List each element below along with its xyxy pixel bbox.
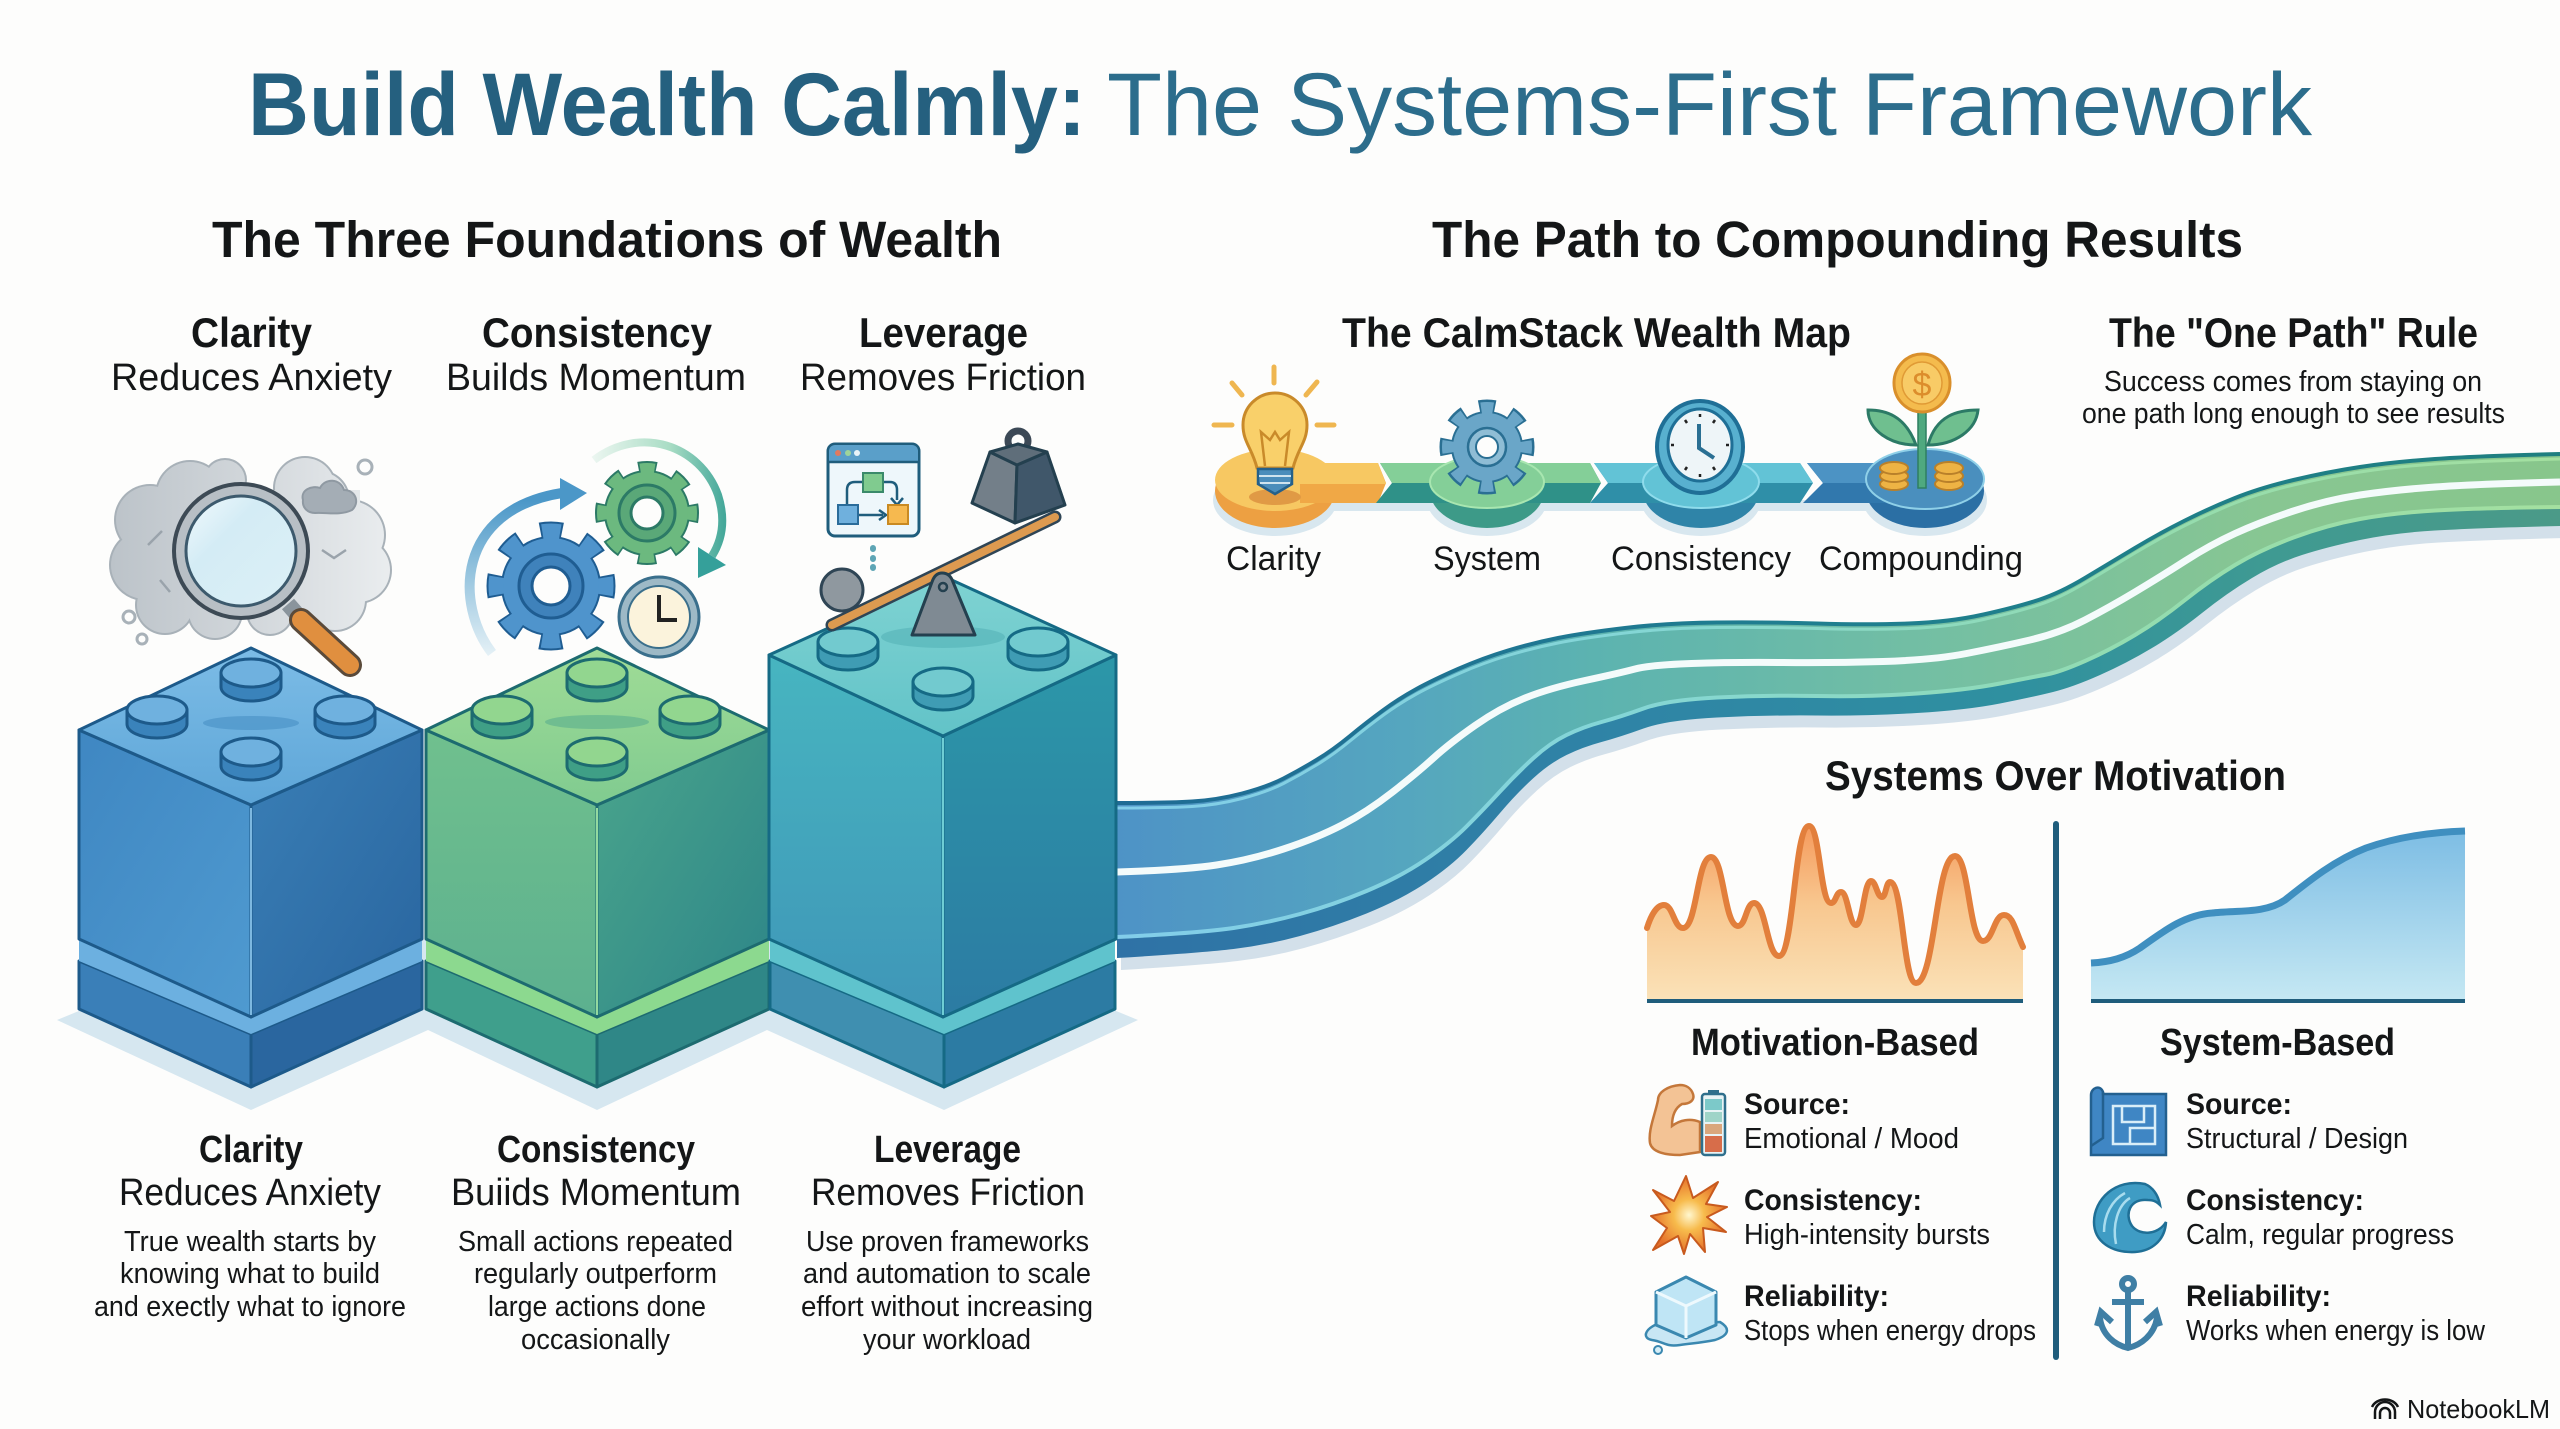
icon: coin plant: $	[1913, 366, 1932, 404]
foundation description: clarity: Clarity	[199, 1129, 303, 1171]
one path rule: one path long enough to see results	[2082, 398, 2505, 430]
foundation description: clarity: knowing what to build	[120, 1258, 380, 1290]
block: consistency (green)	[426, 648, 769, 1087]
foundation description: leverage: your workload	[863, 1324, 1031, 1356]
step: compounding disc and segment	[1803, 449, 1984, 528]
row: consistency (motivation): High-intensity bursts	[1744, 1219, 1990, 1251]
centre divider	[2053, 821, 2059, 1360]
icon: melting ice cube	[1646, 1277, 1727, 1354]
row: source (system): Structural / Design	[2186, 1123, 2408, 1155]
one path rule: Success comes from staying on	[2104, 366, 2482, 398]
block: leverage (teal)	[769, 576, 1116, 1087]
foundation description: consistency: occasionally	[521, 1324, 670, 1356]
row: consistency (motivation): Consistency:	[1744, 1184, 1922, 1217]
foundation description: clarity: Reduces Anxiety	[119, 1172, 381, 1214]
foundation description: clarity: and exectly what to ignore	[94, 1291, 406, 1323]
row: reliability (motivation)	[1744, 1280, 2036, 1347]
heading: systems over motivation: Systems Over Motivation	[1825, 752, 2286, 799]
step: clarity disc	[1215, 449, 1386, 528]
icon: muscle and battery	[1650, 1085, 1725, 1155]
heading: path to compounding: The Path to Compounding Results	[1432, 211, 2243, 268]
title: Build Wealth Calmly:	[248, 54, 1086, 154]
winding path road	[1117, 454, 2560, 970]
icon: gears, clock and arrows	[470, 442, 726, 657]
row: reliability (system): Works when energy is low	[2186, 1315, 2486, 1347]
row: reliability (motivation): Stops when energy drops	[1744, 1315, 2036, 1347]
watermark: NotebookLM: NotebookLM	[2407, 1394, 2550, 1424]
block: clarity (blue)	[79, 648, 422, 1087]
icon: workflow window	[828, 444, 919, 536]
foundation label: clarity	[111, 309, 392, 399]
map label: compounding: Compounding	[1819, 540, 2023, 578]
foundation description: leverage: Leverage	[874, 1129, 1021, 1171]
icon: lever with weight and ball	[821, 431, 1065, 635]
foundation description: clarity	[94, 1129, 406, 1323]
map label: system: System	[1433, 540, 1541, 578]
row: source (motivation): Emotional / Mood	[1744, 1123, 1959, 1155]
icon: gear	[1448, 408, 1526, 486]
row: consistency (system)	[2186, 1184, 2454, 1251]
green gear	[602, 468, 692, 558]
foundation description: consistency	[451, 1129, 741, 1356]
row: reliability (system): Reliability:	[2186, 1280, 2331, 1313]
foundation description: consistency: Small actions repeated	[458, 1226, 733, 1258]
CalmStack wealth map	[1213, 354, 1987, 536]
icon: clock	[1657, 401, 1743, 493]
heading: CalmStack map: The CalmStack Wealth Map	[1342, 309, 1851, 356]
row: source (system)	[2186, 1088, 2408, 1155]
chart: motivation volatility	[1647, 826, 2023, 1003]
foundation description: consistency: regularly outperform	[474, 1258, 717, 1290]
row: reliability (system)	[2186, 1280, 2486, 1347]
row: source (motivation): Source:	[1744, 1088, 1850, 1121]
foundation label: leverage: Removes Friction	[800, 357, 1086, 399]
icon: coin plant	[1868, 354, 1978, 490]
row: consistency (system): Consistency:	[2186, 1184, 2364, 1217]
row: consistency (system): Calm, regular progress	[2186, 1219, 2454, 1251]
foundation label: leverage	[800, 309, 1086, 399]
foundation description: consistency: large actions done	[488, 1291, 706, 1323]
icon: burst	[1651, 1176, 1727, 1254]
icon: blueprint	[2091, 1088, 2166, 1155]
icon: anchor	[2097, 1278, 2160, 1348]
title: The Systems-First Framework	[1107, 54, 2312, 154]
row: reliability (motivation): Reliability:	[1744, 1280, 1889, 1313]
foundation label: clarity: Reduces Anxiety	[111, 357, 392, 399]
foundation description: consistency: Consistency	[497, 1129, 695, 1171]
title	[248, 54, 2312, 154]
foundation description: clarity: True wealth starts by	[124, 1226, 376, 1258]
floor shadow	[57, 940, 1138, 1110]
foundation description: leverage: Use proven frameworks	[806, 1226, 1089, 1258]
map label: consistency: Consistency	[1611, 540, 1791, 578]
step: consistency disc and segment	[1590, 454, 1813, 528]
icon: wave	[2094, 1183, 2166, 1252]
foundation description: leverage: Removes Friction	[811, 1172, 1085, 1214]
foundation label: clarity: Clarity	[191, 309, 313, 356]
foundation description: leverage: effort without increasing	[801, 1291, 1093, 1323]
foundation label: consistency: Consistency	[482, 309, 713, 356]
map shadow	[1213, 464, 1987, 536]
heading: three foundations: The Three Foundations of Wealth	[212, 211, 1002, 268]
label: system-based: System-Based	[2160, 1022, 2395, 1064]
chart: system steady growth	[2091, 831, 2465, 1003]
one path rule: The "One Path" Rule	[2109, 309, 2478, 356]
foundation description: consistency: Buiids Momentum	[451, 1172, 741, 1214]
foundation label: consistency: Builds Momentum	[446, 357, 746, 399]
row: consistency (motivation)	[1744, 1184, 1990, 1251]
row: source (system): Source:	[2186, 1088, 2292, 1121]
foundation label: consistency	[446, 309, 746, 399]
one path rule	[2082, 309, 2505, 430]
foundation description: leverage	[801, 1129, 1093, 1356]
row: source (motivation)	[1744, 1088, 1959, 1155]
foundation description: leverage: and automation to scale	[803, 1258, 1091, 1290]
map label: clarity: Clarity	[1226, 540, 1321, 578]
foundation label: leverage: Leverage	[859, 309, 1028, 356]
icon: light bulb	[1214, 367, 1334, 494]
label: motivation-based: Motivation-Based	[1691, 1022, 1979, 1064]
blue gear	[496, 531, 606, 641]
icon: cloud and magnifying glass	[109, 456, 392, 665]
step: system disc and segment	[1376, 454, 1601, 528]
